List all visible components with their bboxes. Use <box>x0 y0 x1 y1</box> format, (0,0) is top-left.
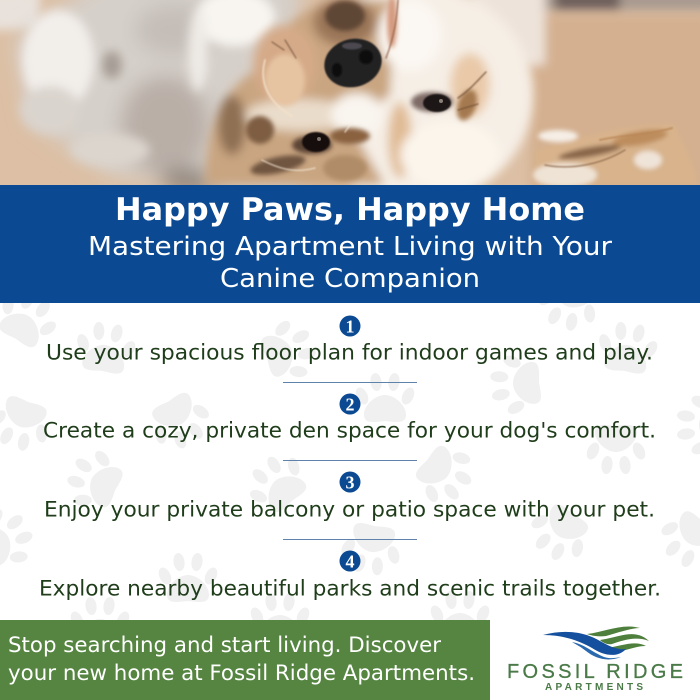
number badge 1 <box>340 316 360 336</box>
photo dog nose <box>323 38 383 88</box>
tip 4 <box>39 550 661 600</box>
subheading line 2: Canine Companion <box>220 264 480 294</box>
photo dog body <box>15 0 300 200</box>
photo fur strokes <box>262 0 672 170</box>
photo dog head <box>205 0 533 205</box>
tip 4 text: Explore nearby beautiful parks and scenic trails together. <box>39 576 661 600</box>
number badge 2: 2 <box>346 394 354 414</box>
Fossil Ridge logo <box>507 627 683 693</box>
photo: dog lying upside down on wood floor <box>0 0 700 205</box>
tip 2 text: Create a cozy, private den space for your dog's comfort. <box>43 418 656 442</box>
call to action line 1: Stop searching and start living. Discover <box>8 633 441 657</box>
call to action line 2: your new home at Fossil Ridge Apartments. <box>8 661 475 685</box>
number badge 3 <box>340 472 360 492</box>
number badge 2 <box>340 394 360 414</box>
tip 1 text: Use your spacious floor plan for indoor games and play. <box>46 340 653 364</box>
photo dog right eye <box>411 92 453 112</box>
logo sub name: APARTMENTS <box>545 682 643 693</box>
number badge 4: 4 <box>346 552 354 572</box>
number badge 4 <box>340 550 360 572</box>
photo dog left eye <box>292 132 332 154</box>
logo mark: blue waves <box>543 632 626 659</box>
logo name: FOSSIL RIDGE <box>507 661 683 683</box>
tip 3 <box>44 472 655 522</box>
tip 2 <box>43 394 656 442</box>
number badge 1: 1 <box>346 316 354 336</box>
title band <box>0 185 700 303</box>
tip 3 text: Enjoy your private balcony or patio space with your pet. <box>44 498 655 522</box>
logo mark: green waves <box>587 627 649 652</box>
heading: Happy Paws, Happy Home <box>115 192 585 228</box>
tip 1 <box>46 316 653 364</box>
call to action panel <box>0 620 490 700</box>
subheading line 1: Mastering Apartment Living with Your <box>88 232 612 262</box>
photo floor <box>0 0 700 186</box>
photo ear fluff <box>531 127 670 185</box>
logo background <box>490 620 700 700</box>
number badge 3: 3 <box>346 472 354 492</box>
background paw pattern <box>0 270 700 646</box>
